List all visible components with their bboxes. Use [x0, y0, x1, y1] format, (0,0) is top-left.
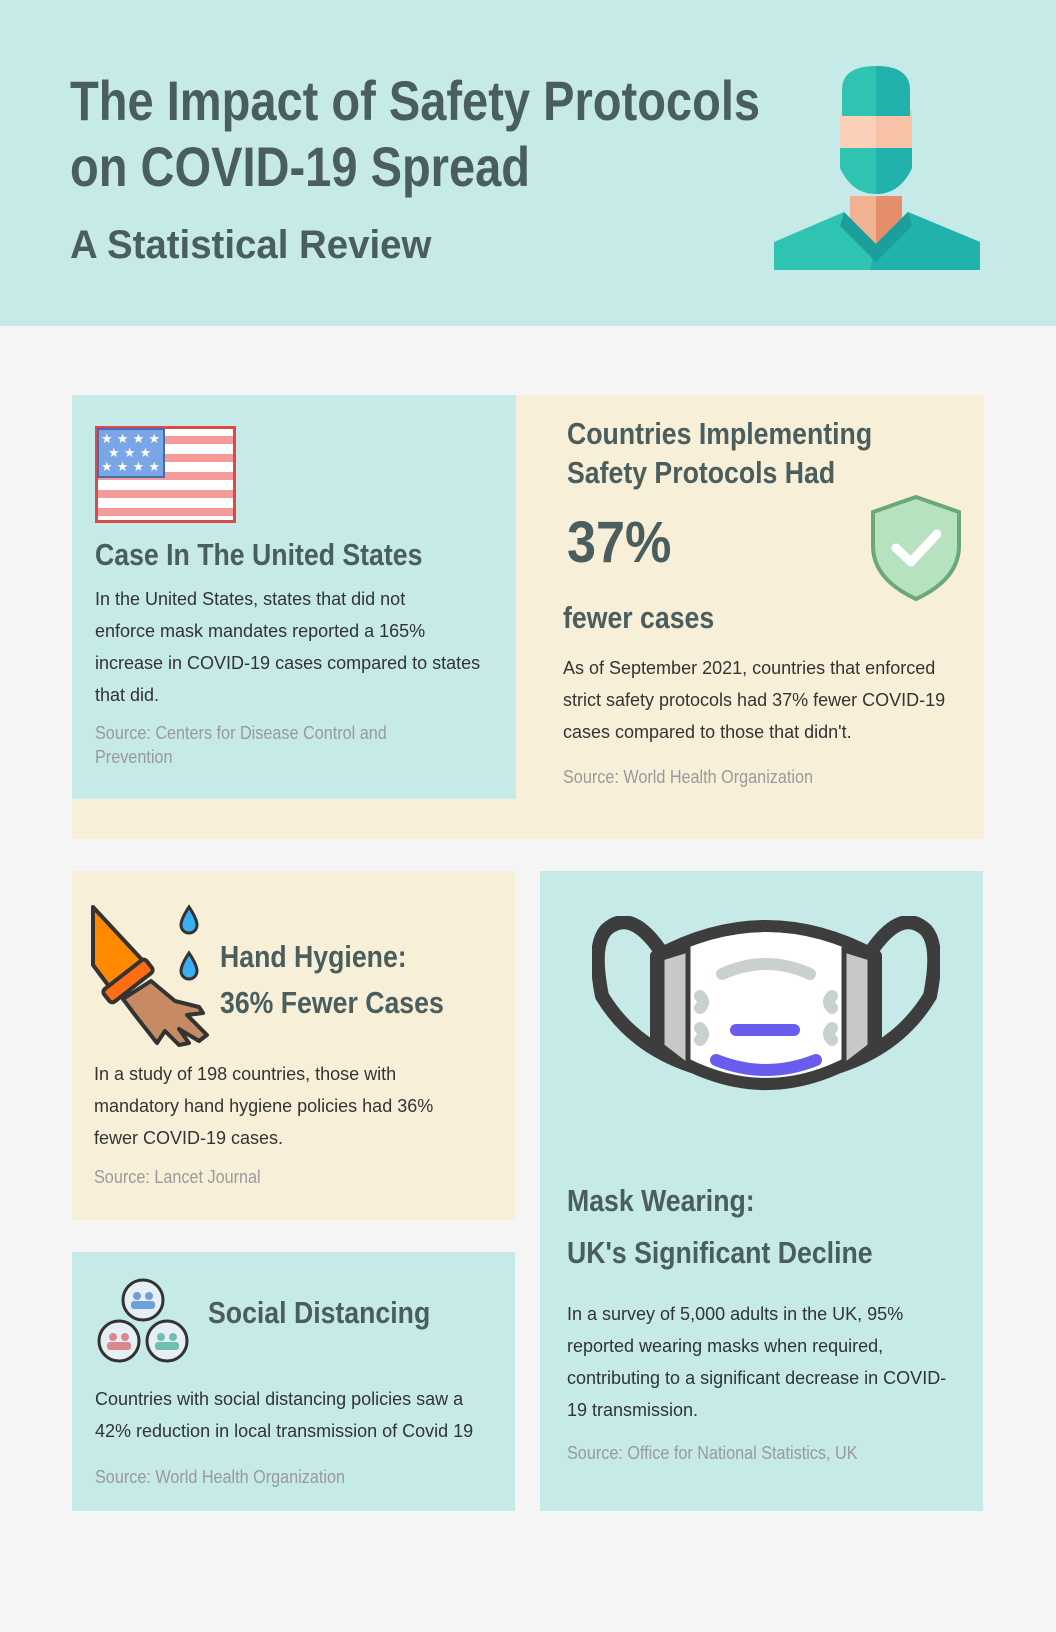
source	[95, 723, 387, 767]
heading: social distancing: Social Distancing	[208, 1295, 430, 1330]
icon: shield	[871, 494, 961, 602]
icon: us flag	[95, 426, 236, 523]
icon: people groups	[98, 1278, 188, 1362]
text block: fewer COVID-19 cases.	[94, 1128, 283, 1148]
header	[0, 0, 1056, 326]
title	[70, 69, 760, 198]
text block: strict safety protocols had 37% fewer COVID-19	[563, 690, 945, 710]
subtitle: A Statistical Review	[70, 223, 431, 267]
heading: countries implementing: Safety Protocols Had	[567, 455, 835, 490]
source: Source: Centers for Disease Control and	[95, 723, 387, 743]
panel: mask wearing	[540, 871, 983, 1511]
icon: face mask	[592, 916, 940, 1090]
heading: countries implementing	[567, 416, 872, 490]
text block: cases compared to those that didn't.	[563, 722, 852, 742]
text block	[567, 1304, 946, 1420]
source: Source: Lancet Journal	[94, 1167, 261, 1187]
heading: mask wearing: Mask Wearing:	[567, 1183, 755, 1218]
source: Source: World Health Organization	[95, 1467, 345, 1487]
text block: that did.	[95, 685, 159, 705]
title: on COVID-19 Spread	[70, 135, 530, 198]
text block	[94, 1064, 433, 1148]
heading: case in US: Case In The United States	[95, 537, 422, 572]
title: The Impact of Safety Protocols	[70, 69, 760, 132]
text block	[95, 589, 480, 705]
icon: us flag: ★ ★ ★	[108, 446, 151, 461]
text block	[563, 658, 945, 742]
icon: us flag: ★ ★ ★ ★	[101, 460, 160, 475]
text block: Countries with social distancing policies saw a	[95, 1389, 463, 1409]
heading: mask wearing: UK's Significant Decline	[567, 1235, 873, 1270]
text block: As of September 2021, countries that enforced	[563, 658, 935, 678]
text block: reported wearing masks when required,	[567, 1336, 883, 1356]
panel: hand hygiene	[72, 871, 515, 1220]
source: Source: Office for National Statistics, UK	[567, 1443, 858, 1463]
text block: In the United States, states that did not	[95, 589, 405, 609]
heading: fewer cases: fewer cases	[563, 600, 714, 635]
stat: 37%: 37%	[567, 510, 671, 575]
heading: hand hygiene	[220, 939, 444, 1020]
heading: countries implementing: Countries Implementing	[567, 416, 872, 451]
text block: In a study of 198 countries, those with	[94, 1064, 396, 1084]
panel: social distancing	[72, 1252, 515, 1511]
source: Source: World Health Organization	[563, 767, 813, 787]
panel: countries (yellow background)	[72, 395, 984, 839]
text block: increase in COVID-19 cases compared to states	[95, 653, 480, 673]
source: Prevention	[95, 747, 172, 767]
heading: mask wearing	[567, 1183, 873, 1270]
icon: us flag: ★ ★ ★ ★	[101, 432, 160, 447]
text block: mandatory hand hygiene policies had 36%	[94, 1096, 433, 1116]
text block: 42% reduction in local transmission of Covid 19	[95, 1421, 473, 1441]
text block: 19 transmission.	[567, 1400, 698, 1420]
heading: hand hygiene: Hand Hygiene:	[220, 939, 407, 974]
text block	[95, 1389, 473, 1441]
icon: hand washing	[91, 904, 210, 1047]
panel: united states	[72, 395, 516, 799]
heading: hand hygiene: 36% Fewer Cases	[220, 985, 444, 1020]
text block: contributing to a significant decrease in COVID-	[567, 1368, 946, 1388]
text block: In a survey of 5,000 adults in the UK, 95%	[567, 1304, 903, 1324]
text block: enforce mask mandates reported a 165%	[95, 621, 425, 641]
icon: doctor	[774, 66, 980, 270]
